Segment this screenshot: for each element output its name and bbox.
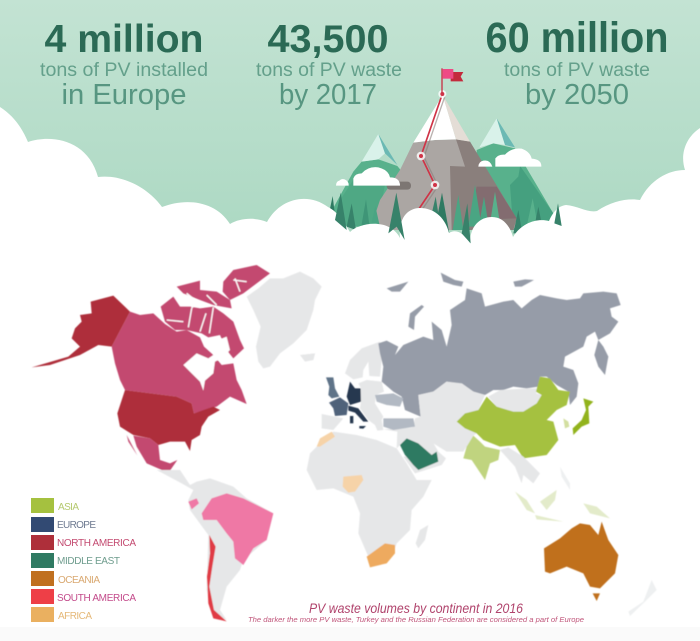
New Zealand: [628, 580, 657, 616]
Brazil: [202, 493, 273, 565]
China: [457, 377, 570, 458]
legend: [31, 498, 136, 622]
stat: 43,500: [256, 18, 402, 111]
stat: 60 million: 60 million: [486, 14, 668, 62]
Ukraine and Turkey: [375, 393, 415, 430]
stat: 43,500: 43,500: [268, 18, 388, 61]
stat: 4 million: tons of PV installed: [40, 60, 208, 81]
stat: 43,500: by 2017: [279, 79, 377, 111]
Russia: [378, 273, 621, 417]
panel: South America: [157, 470, 273, 621]
small clouds on mountains: [336, 148, 541, 190]
Alaska: [32, 296, 130, 367]
Greenland and Iceland: [247, 272, 322, 368]
left green mountain: [327, 134, 403, 227]
map caption: [248, 600, 584, 624]
stat: 60 million: by 2050: [525, 79, 629, 111]
stat: 4 million: [40, 18, 208, 111]
panel: Eurasia: [375, 273, 621, 480]
legend: Europe: EUROPE: [57, 520, 96, 531]
legend: Asia: ASIA: [58, 502, 79, 513]
panel: North America: [32, 265, 322, 471]
Chile: [207, 535, 227, 621]
Australia: [544, 522, 618, 588]
bottom band: [0, 627, 700, 641]
stat: 60 million: [486, 14, 668, 111]
USA: [117, 390, 220, 451]
stat: 4 million: 4 million: [44, 18, 204, 61]
Japan: [573, 398, 593, 435]
legend: North America: NORTH AMERICA: [57, 538, 136, 549]
legend: South America: SOUTH AMERICA: [57, 593, 136, 604]
foreground trees: [335, 193, 562, 243]
Tasmania: [593, 593, 600, 601]
Canada: [112, 265, 270, 413]
Central Asia grey: [400, 382, 485, 452]
world map: [32, 265, 657, 621]
legend: Middle East: MIDDLE EAST: [57, 556, 120, 567]
right green mountain: [477, 118, 553, 230]
header sky background: [0, 0, 700, 250]
Mongolia: [488, 388, 542, 412]
panel: Europe, Africa and Middle East: [302, 342, 446, 567]
panel: South East Asia: [500, 447, 610, 522]
legend: Oceania: OCEANIA: [58, 575, 100, 586]
pine trees behind clouds: [328, 185, 542, 233]
Arctic channels: [167, 278, 247, 333]
grey mainland: [500, 447, 540, 483]
map caption: PV waste volumes by continent in 2016: [309, 600, 523, 616]
illustration: mountains with flag: [327, 68, 553, 233]
legend: Africa: AFRICA: [58, 611, 92, 622]
Morocco and Nigeria: [317, 432, 363, 493]
South Africa: [367, 543, 395, 567]
flag: [441, 68, 463, 94]
Mexico: [127, 435, 177, 471]
South Korea: [563, 418, 569, 428]
stat: 43,500: tons of PV waste: [256, 60, 402, 81]
Hudson Bay: [183, 337, 230, 391]
grey countries Europe and Africa: [302, 342, 446, 557]
Indonesia: [515, 490, 610, 522]
panel: Oceania: [544, 522, 657, 616]
cloud bank: [0, 107, 700, 255]
India: [463, 436, 500, 480]
Central America and grey South America: [157, 470, 273, 620]
stat: 4 million: in Europe: [62, 79, 186, 111]
map caption: The darker the more PV waste, Turkey and the Russian Federation are considered a part of Europe: [248, 615, 584, 624]
Europe highlighted countries: [326, 377, 368, 429]
Ecuador: [188, 498, 199, 509]
Saudi Arabia: [400, 438, 438, 470]
central grey mountain: [370, 95, 517, 230]
stat: 60 million: tons of PV waste: [504, 60, 650, 81]
climbing route: [417, 90, 446, 209]
